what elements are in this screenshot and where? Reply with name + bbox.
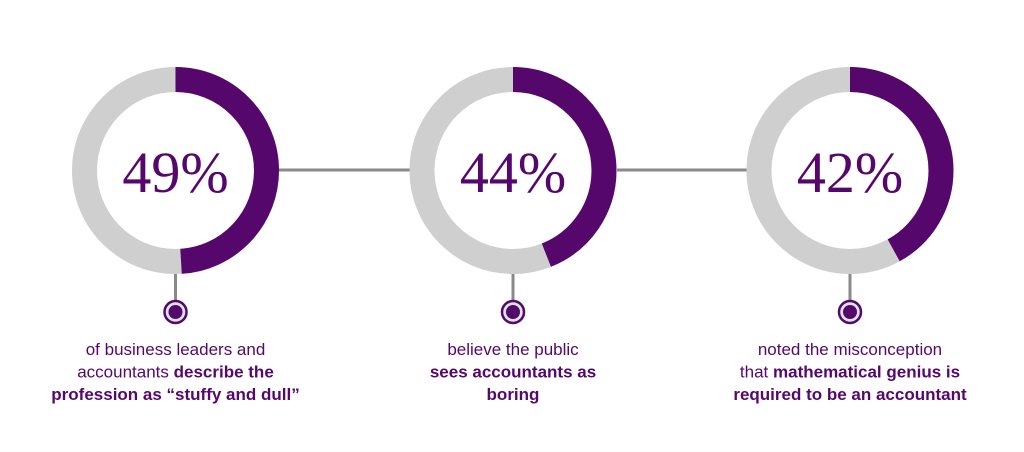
caption 3 <box>733 340 967 404</box>
donut 3: 42% <box>759 80 941 323</box>
connector lines <box>279 168 747 172</box>
caption 1: of business leaders and <box>86 340 265 359</box>
donut 2: 44%: 44% <box>460 140 566 205</box>
caption 1: accountants describe the <box>77 362 274 382</box>
caption 3: noted the misconception <box>758 340 942 359</box>
caption 2: believe the public <box>447 340 579 359</box>
caption 3: that mathematical genius is <box>740 362 960 382</box>
caption 1: profession as “stuffy and dull” <box>51 385 300 404</box>
donut 2: 44% <box>422 80 604 323</box>
donut 3: 42%: 42% <box>797 140 903 205</box>
donut 1: 49%: 49% <box>122 140 229 205</box>
caption 2 <box>430 340 596 404</box>
caption 3: required to be an accountant <box>733 385 967 404</box>
caption 2: sees accountants as <box>430 362 596 382</box>
donut 1: 49% <box>84 80 266 323</box>
caption 1 <box>51 340 300 404</box>
caption 2: boring <box>487 385 539 404</box>
